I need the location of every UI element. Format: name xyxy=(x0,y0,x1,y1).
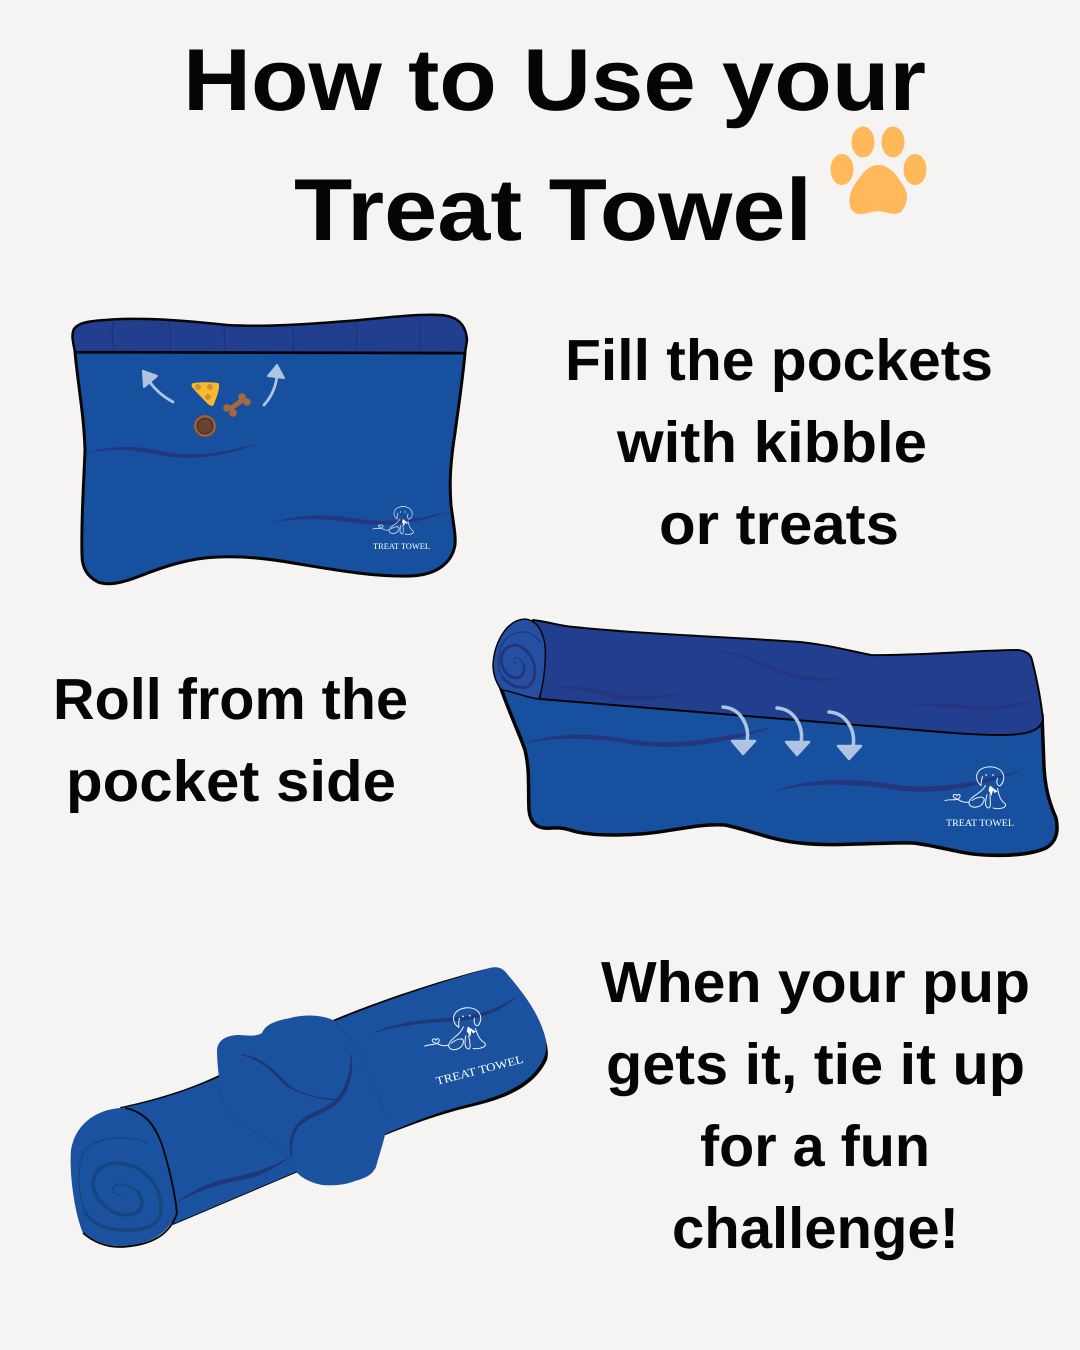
brand logo xyxy=(421,1006,525,1088)
wrinkles on roll xyxy=(526,650,1038,791)
arrow: roll down 3 xyxy=(829,712,861,759)
brand logo: TREAT TOWEL xyxy=(435,1054,525,1088)
roll end xyxy=(71,1108,176,1246)
illustration: tied towel xyxy=(71,967,548,1247)
knot xyxy=(217,1016,387,1185)
roll spiral xyxy=(79,1138,161,1230)
icon: bone xyxy=(223,393,251,417)
panel: tie it up text: When your pup xyxy=(601,950,1030,1015)
towel lower body xyxy=(498,680,1057,855)
panel: tie it up text: for a fun xyxy=(700,1114,930,1179)
towel folded band xyxy=(72,315,467,353)
towel rolled body shadow edges xyxy=(120,968,548,1225)
towel rolled body xyxy=(120,967,546,1224)
arrow: roll down 1 xyxy=(723,707,755,754)
towel body xyxy=(75,352,465,584)
brand logo xyxy=(945,767,1014,829)
illustration: rolling towel xyxy=(493,619,1057,855)
brand logo xyxy=(373,506,430,551)
roll spiral xyxy=(498,632,540,688)
title xyxy=(183,30,926,259)
arrow: up right xyxy=(264,365,284,405)
arrow: up left xyxy=(143,371,173,402)
icon: cheese xyxy=(192,382,219,406)
title line 1: How to Use your xyxy=(183,30,926,129)
icon: paw print xyxy=(830,126,926,214)
panel: roll text: Roll from the xyxy=(53,667,408,732)
brand logo: TREAT TOWEL xyxy=(946,819,1014,829)
arrow: roll down 2 xyxy=(777,708,809,755)
wrinkles on body xyxy=(176,996,517,1203)
panel: tie it up text: gets it, tie it up xyxy=(606,1032,1025,1097)
panel: fill the pockets text: or treats xyxy=(659,492,899,557)
panel: fill the pockets text: with kibble xyxy=(616,410,927,475)
roll end xyxy=(493,619,545,699)
panel: roll text: pocket side xyxy=(66,749,396,814)
pocket seam upper xyxy=(87,444,255,458)
panel: tie it up text xyxy=(601,950,1030,1261)
panel: fill the pockets text xyxy=(565,328,993,557)
icon: kibble xyxy=(194,415,216,437)
rolled band xyxy=(533,620,1043,735)
roll end outline xyxy=(83,1108,177,1247)
band fold lines xyxy=(112,318,420,351)
brand logo: TREAT TOWEL xyxy=(373,542,430,551)
panel: tie it up text: challenge! xyxy=(672,1196,959,1261)
panel: roll text xyxy=(53,667,408,814)
panel: fill the pockets text: Fill the pockets xyxy=(565,328,993,393)
illustration: flat towel with pockets xyxy=(72,315,467,584)
title line 2: Treat Towel xyxy=(294,160,812,259)
pocket seam lower xyxy=(275,512,447,524)
